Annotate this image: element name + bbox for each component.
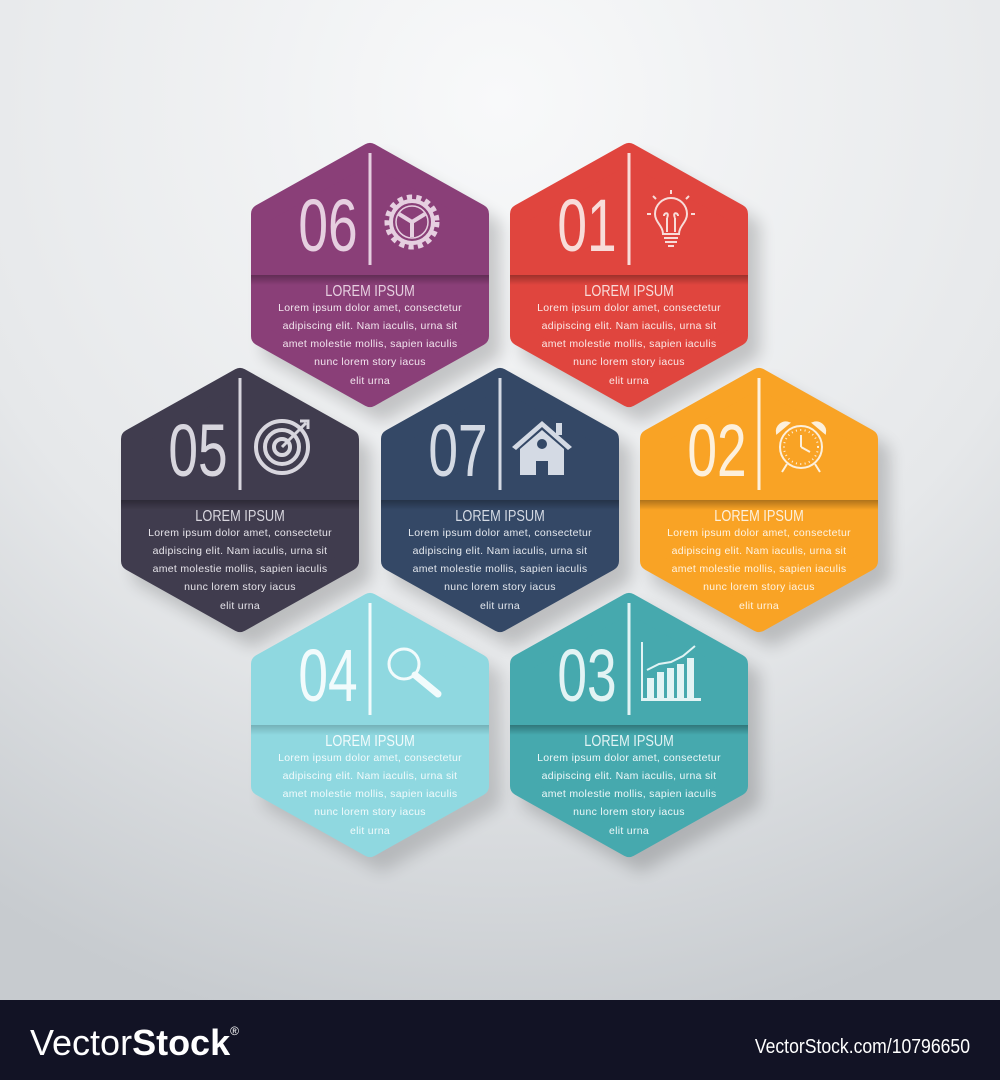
- hexagon 03: [510, 603, 750, 861]
- body text: elit urna: [609, 825, 649, 837]
- body text: nunc lorem story iacus: [573, 806, 685, 818]
- body text: adipiscing elit. Nam iaculis, urna sit: [283, 770, 457, 782]
- hexagon 06: [251, 153, 491, 411]
- body text: Lorem ipsum dolor amet, consectetur: [537, 302, 721, 314]
- body text: elit urna: [350, 375, 390, 387]
- icon: alarm clock: [777, 422, 825, 472]
- body text: [537, 302, 721, 387]
- hexagon 05: [121, 378, 361, 636]
- hexagon 01: [510, 153, 750, 411]
- body text: elit urna: [739, 600, 779, 612]
- body text: adipiscing elit. Nam iaculis, urna sit: [413, 545, 587, 557]
- title: LOREM IPSUM: [325, 733, 415, 750]
- icon: house: [512, 421, 572, 475]
- body text: amet molestie mollis, sapien iaculis: [542, 338, 716, 350]
- body text: adipiscing elit. Nam iaculis, urna sit: [542, 320, 716, 332]
- body text: [278, 302, 462, 387]
- body text: elit urna: [609, 375, 649, 387]
- body text: amet molestie mollis, sapien iaculis: [542, 788, 716, 800]
- body text: elit urna: [480, 600, 520, 612]
- body text: [148, 527, 332, 612]
- body text: nunc lorem story iacus: [573, 356, 685, 368]
- body text: Lorem ipsum dolor amet, consectetur: [278, 302, 462, 314]
- body text: nunc lorem story iacus: [314, 806, 426, 818]
- body text: amet molestie mollis, sapien iaculis: [283, 788, 457, 800]
- title: LOREM IPSUM: [455, 508, 545, 525]
- body text: nunc lorem story iacus: [184, 581, 296, 593]
- footer bar: [0, 1000, 1000, 1080]
- hexagon 02: [640, 378, 880, 636]
- body text: [408, 527, 592, 612]
- body text: adipiscing elit. Nam iaculis, urna sit: [672, 545, 846, 557]
- body text: nunc lorem story iacus: [703, 581, 815, 593]
- number 03: 03: [557, 634, 617, 717]
- icon: gear: [388, 198, 436, 246]
- title: LOREM IPSUM: [584, 283, 674, 300]
- body text: adipiscing elit. Nam iaculis, urna sit: [283, 320, 457, 332]
- title: LOREM IPSUM: [714, 508, 804, 525]
- body text: Lorem ipsum dolor amet, consectetur: [148, 527, 332, 539]
- body text: amet molestie mollis, sapien iaculis: [283, 338, 457, 350]
- body text: Lorem ipsum dolor amet, consectetur: [537, 752, 721, 764]
- number 07: 07: [428, 409, 488, 492]
- title: LOREM IPSUM: [584, 733, 674, 750]
- number 05: 05: [168, 409, 228, 492]
- number 04: 04: [298, 634, 358, 717]
- body text: adipiscing elit. Nam iaculis, urna sit: [153, 545, 327, 557]
- icon: light bulb: [647, 190, 695, 246]
- number 02: 02: [687, 409, 747, 492]
- body text: [537, 752, 721, 837]
- body text: Lorem ipsum dolor amet, consectetur: [278, 752, 462, 764]
- body text: [667, 527, 851, 612]
- number 01: 01: [557, 184, 617, 267]
- body text: nunc lorem story iacus: [444, 581, 556, 593]
- body text: amet molestie mollis, sapien iaculis: [153, 563, 327, 575]
- body text: elit urna: [350, 825, 390, 837]
- body text: nunc lorem story iacus: [314, 356, 426, 368]
- body text: amet molestie mollis, sapien iaculis: [413, 563, 587, 575]
- body text: Lorem ipsum dolor amet, consectetur: [667, 527, 851, 539]
- icon: bar chart: [641, 642, 701, 701]
- footer logo: ®: [230, 1024, 239, 1038]
- title: LOREM IPSUM: [325, 283, 415, 300]
- body text: [278, 752, 462, 837]
- number 06: 06: [298, 184, 358, 267]
- hexagon 04: [251, 603, 491, 861]
- body text: amet molestie mollis, sapien iaculis: [672, 563, 846, 575]
- body text: Lorem ipsum dolor amet, consectetur: [408, 527, 592, 539]
- icon: magnifier: [389, 649, 438, 694]
- hexagon 07: [381, 378, 621, 636]
- body text: adipiscing elit. Nam iaculis, urna sit: [542, 770, 716, 782]
- body text: elit urna: [220, 600, 260, 612]
- title: LOREM IPSUM: [195, 508, 285, 525]
- icon: target: [256, 421, 308, 473]
- footer url: VectorStock.com/10796650: [755, 1035, 970, 1057]
- footer logo: VectorStock: [30, 1022, 230, 1063]
